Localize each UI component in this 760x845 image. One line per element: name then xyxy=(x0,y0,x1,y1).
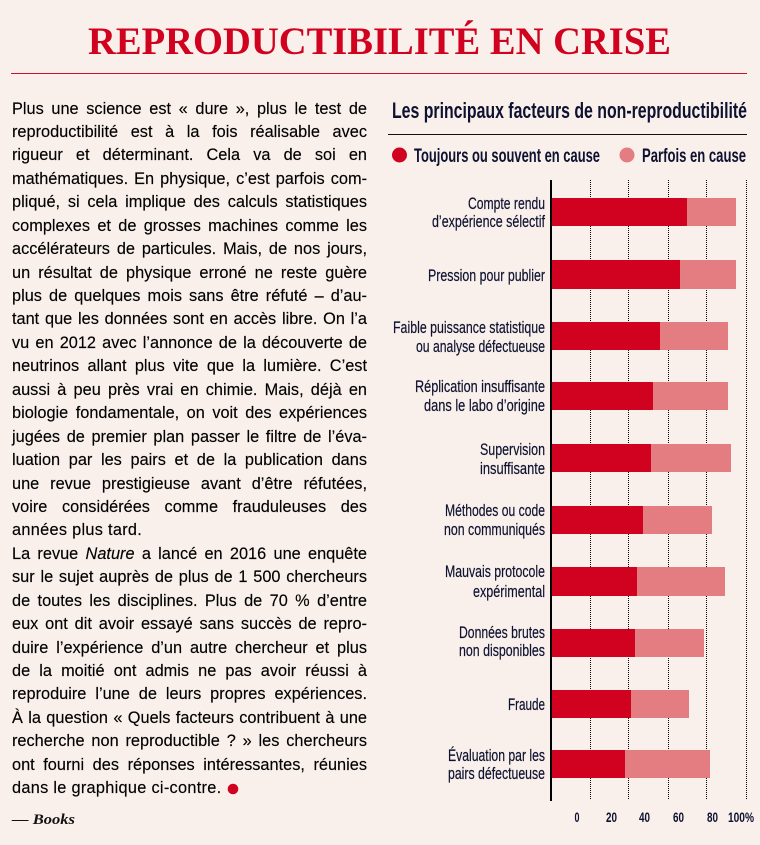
category labels: Supervision xyxy=(480,440,545,459)
end mark xyxy=(228,784,238,794)
axis tick labels: 0 xyxy=(574,809,580,825)
article text: eux ont dit avoir essayé sans succès de repro- xyxy=(12,614,367,633)
article text xyxy=(12,98,368,797)
bar: pression xyxy=(551,260,736,289)
axis tick labels: 20 xyxy=(606,809,617,825)
legend xyxy=(392,145,746,167)
article text: dans le graphique ci-contre. xyxy=(12,778,221,797)
article text: recherche non reproductible ? » les chercheurs xyxy=(12,731,367,750)
article text: plus de quelques mois sans être réfuté – d’au- xyxy=(12,286,367,305)
article text: reproduire l’une de leurs propres expériences. xyxy=(12,684,367,703)
category labels: Méthodes ou code xyxy=(445,501,545,520)
legend: always or often xyxy=(392,145,600,167)
category labels: insuffisante xyxy=(480,459,545,478)
axis tick labels: 40 xyxy=(639,809,650,825)
bar: replication xyxy=(551,382,728,410)
category labels: ou analyse défectueuse xyxy=(416,337,545,356)
category labels: Évaluation par les xyxy=(448,746,545,765)
axis tick labels: 60 xyxy=(673,809,684,825)
article text: accélérateurs de particules. Mais, de nos jours, xyxy=(12,239,367,258)
article text: sur le sujet auprès de plus de 1 500 chercheurs xyxy=(12,567,367,586)
bar: fraude xyxy=(551,690,689,718)
category labels: expérimental xyxy=(473,582,545,601)
category labels xyxy=(393,194,545,783)
article text: ont fourni des réponses intéressantes, réunies xyxy=(12,755,367,774)
source credit: — Books xyxy=(11,812,75,828)
axis tick labels xyxy=(574,809,754,825)
title: REPRODUCTIBILITÉ EN CRISE xyxy=(88,19,671,63)
category labels: Données brutes xyxy=(459,623,545,642)
article text: À la question « Quels facteurs contribuent à une xyxy=(12,708,367,727)
category labels: d’expérience sélectif xyxy=(432,212,545,231)
article text: duire l’expérience d’un autre chercheur et plus xyxy=(12,638,367,657)
article text: neutrinos allant plus vite que la lumière. C’est xyxy=(12,356,367,375)
article text: luation par les pairs et de la publication dans xyxy=(12,450,367,469)
article text: aussi à peu près vrai en chimie. Mais, déjà en xyxy=(12,380,367,399)
article text: vu en 2012 avec l’annonce de la découverte de xyxy=(12,333,367,352)
article text: jugées de premier plan passer le filtre de l’éva- xyxy=(12,427,367,446)
category labels: Fraude xyxy=(508,695,545,714)
article text: de la moitié ont admis ne pas avoir réussi à xyxy=(12,661,367,680)
article text: Plus une science est « dure », plus le test de xyxy=(12,98,367,118)
article text: mathématiques. En physique, c’est parfois com- xyxy=(12,169,367,188)
bar: supervision xyxy=(551,444,731,472)
category labels: Mauvais protocole xyxy=(445,562,545,581)
article text: voire considérées comme frauduleuses des xyxy=(12,497,367,516)
legend: always or often: Toujours ou souvent en cause xyxy=(414,145,600,167)
category labels: Pression pour publier xyxy=(428,266,545,285)
category labels: dans le labo d’origine xyxy=(424,396,545,415)
article text: complexes et de grosses machines comme les xyxy=(12,216,367,235)
article text: de toutes les disciplines. Plus de 70 % d’entre xyxy=(12,591,367,610)
bar: donnees xyxy=(551,629,704,657)
category labels: pairs défectueuse xyxy=(448,764,545,783)
bar: protocole xyxy=(551,567,725,596)
category labels: non disponibles xyxy=(459,641,545,660)
category labels: Réplication insuffisante xyxy=(415,377,545,396)
category labels: non communiqués xyxy=(444,520,545,539)
article text: pliqué, si cela implique des calculs statistiques xyxy=(12,192,367,211)
article text: rigueur et déterminant. Cela va de soi en xyxy=(12,145,367,164)
article text: biologie fondamentale, on voit des expériences xyxy=(12,403,367,422)
article text: un résultat de physique erroné ne reste guère xyxy=(12,263,367,282)
article text: La revue Nature a lancé en 2016 une enquête xyxy=(12,544,367,563)
bar chart xyxy=(550,180,746,801)
article text: années plus tard. xyxy=(12,520,142,539)
bar: puissance statistique xyxy=(551,322,728,350)
bar: evaluation xyxy=(551,750,710,778)
article text: tant que les données sont en accès libre. On l’a xyxy=(12,309,367,328)
category labels: Faible puissance statistique xyxy=(393,318,545,337)
bar: methodes xyxy=(551,506,712,534)
article text: reproductibilité est à la fois réalisable avec xyxy=(12,122,367,141)
category labels: Compte rendu xyxy=(468,194,545,213)
bar: compte rendu xyxy=(551,198,736,226)
article text: une revue prestigieuse avant d’être réfutées, xyxy=(12,474,367,492)
axis tick labels: 80 xyxy=(707,809,718,825)
